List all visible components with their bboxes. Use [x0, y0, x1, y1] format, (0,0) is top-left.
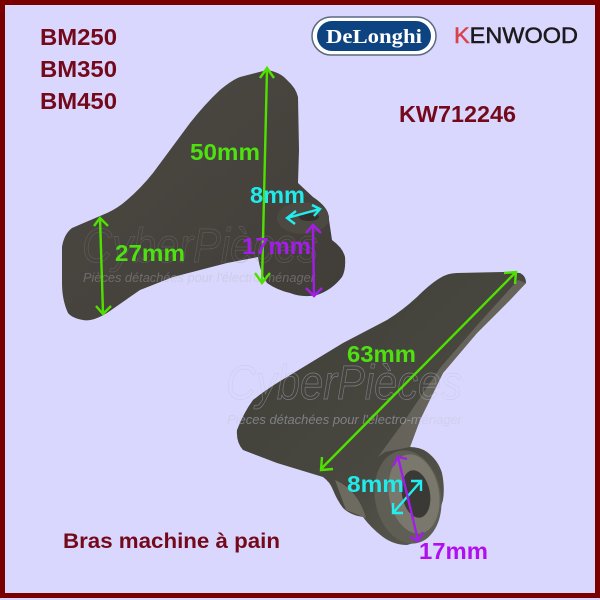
watermark upper: Pièces détachées pour l'électro-ménager	[83, 270, 316, 285]
arrow: 8mm upper	[287, 205, 320, 224]
logo: DeLonghi: DeLonghi	[326, 26, 422, 48]
arrow: 17mm upper	[306, 225, 322, 296]
lower paddle hub	[367, 445, 449, 549]
arrow: 63mm length	[321, 272, 516, 470]
label: 63mm: 63mm	[347, 341, 416, 367]
label: 17mm lower: 17mm	[419, 538, 488, 564]
watermark lower	[226, 357, 463, 427]
model list: BM250	[40, 24, 117, 50]
product: upper kneading paddle	[62, 70, 345, 320]
model list: BM450	[40, 88, 117, 114]
watermark lower: Pièces détachées pour l'électro-ménager	[227, 412, 463, 427]
upper paddle hub	[277, 202, 329, 234]
label: 27mm: 27mm	[115, 240, 185, 266]
model list: BM350	[40, 56, 117, 82]
arrow: 8mm lower	[393, 481, 421, 513]
label: 8mm lower: 8mm	[347, 471, 404, 497]
label: 8mm upper: 8mm	[250, 182, 305, 208]
caption: Bras machine à pain	[63, 530, 280, 553]
product: lower kneading paddle	[237, 272, 526, 549]
label: 17mm upper: 17mm	[242, 233, 311, 259]
label: 50mm: 50mm	[190, 139, 260, 165]
watermark lower: CyberPièces	[226, 357, 462, 410]
arrow: 27mm width	[94, 218, 111, 314]
arrow: 17mm lower	[393, 457, 423, 541]
logo: DeLonghi	[312, 17, 436, 55]
arrow: 50mm height	[255, 68, 274, 283]
model list	[40, 24, 117, 114]
watermark upper: CyberPièces	[82, 220, 318, 273]
logo: Kenwood: KENWOOD	[454, 23, 578, 48]
lower paddle side edge	[378, 280, 526, 457]
part number: KW712246	[399, 101, 516, 127]
